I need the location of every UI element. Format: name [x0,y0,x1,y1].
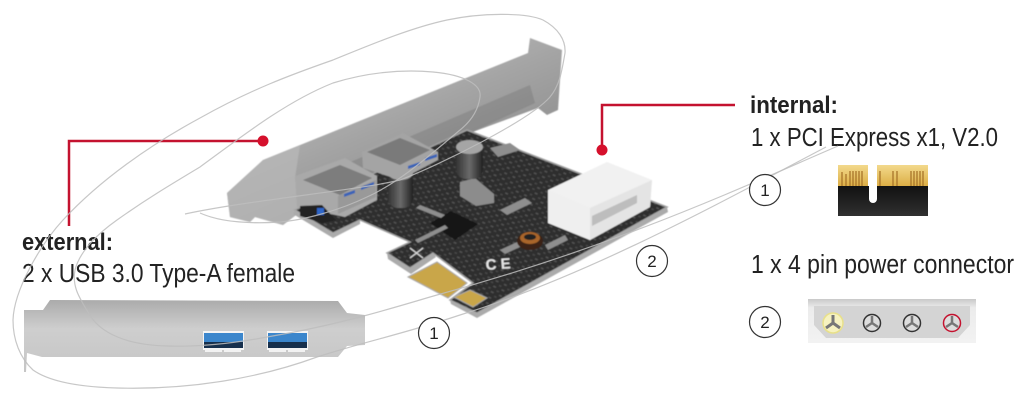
low-profile metal bracket [227,38,562,225]
number badge 1 in legend: 1 [760,181,770,200]
circuit board [290,125,670,320]
inductor [517,232,543,250]
front view of bracket with USB ports [24,300,365,372]
text: USB ports: 2 x USB 3.0 Type-A female [22,260,295,288]
number badge 2 on card [636,246,668,276]
thin grey swoosh lines [13,14,838,388]
controller chip [430,211,478,240]
small recycling mark [410,248,423,258]
electrolytic capacitors [388,140,483,208]
product photo: PCI Express card [227,38,670,320]
number badge 1 on card: 1 [429,324,439,343]
USB ports on bracket [295,133,438,223]
white 4 pin power connector [548,162,652,240]
USB port 2 [267,331,308,351]
number badge 2 in legend [750,306,780,338]
pin: yellow [823,313,843,333]
CE mark: C E [485,255,511,274]
number badge 1 in legend [750,174,780,206]
number badge 2 in legend: 2 [760,313,770,332]
number badge 2 on card: 2 [647,252,657,271]
crystal [460,178,494,206]
heading: external: external: [22,229,113,256]
heading: internal: internal: [750,92,838,119]
red callout line: internal [596,105,735,156]
pin: black [864,314,880,332]
number badge 1 on card [418,318,450,348]
pin: red [944,314,960,332]
icon: 4 pin Molex connector [808,299,976,343]
PCIe edge connector [408,262,487,307]
icon: PCIe x1 edge connector [838,165,928,216]
board components [415,143,568,254]
USB port 1 [203,331,244,351]
red callout line: external [69,136,268,226]
pin: black [904,314,920,332]
